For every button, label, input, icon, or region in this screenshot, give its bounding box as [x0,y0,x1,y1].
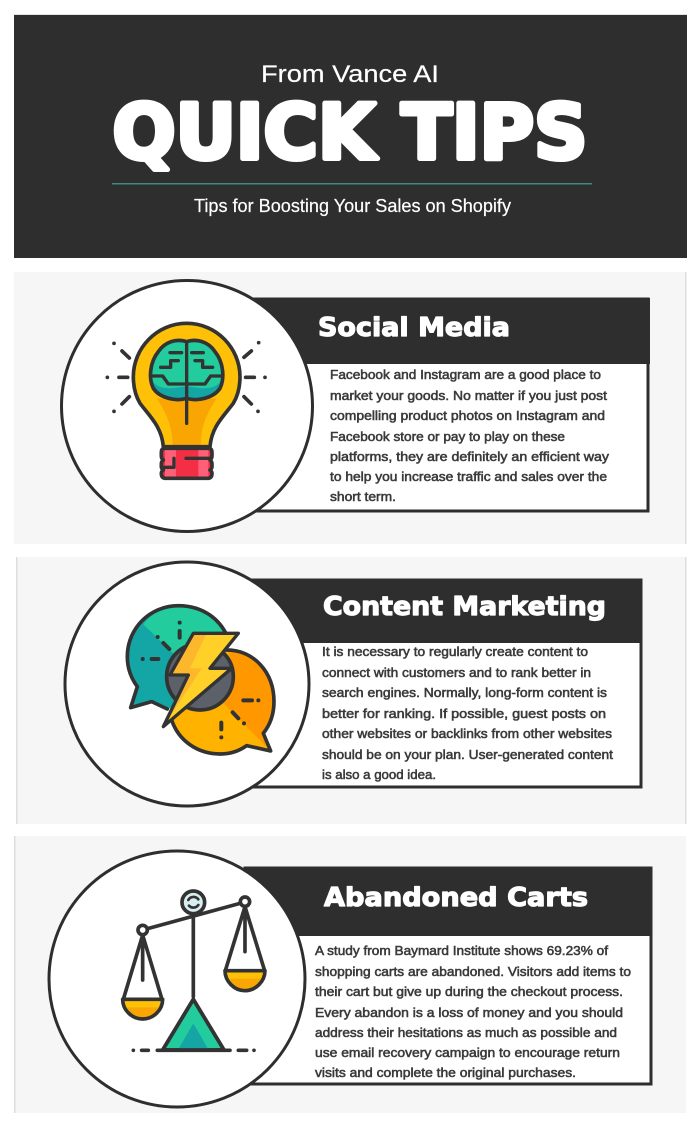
body text: other websites or backlinks from other websites [322,726,613,741]
body text: address their hesitations as much as possible and [315,1025,617,1040]
body text [322,644,613,782]
body text: should be on your plan. User-generated content [322,747,613,762]
heading bar [250,579,642,643]
panel: abandoned carts [14,836,686,1113]
header kicker: From Vance AI [261,61,439,88]
body text [330,367,610,504]
heading bar [250,298,650,364]
body text: is also a good idea. [322,767,436,782]
panel: social media [14,272,686,544]
body text: Every abandon is a loss of money and you should [315,1005,623,1020]
body text: search engines. Normally, long-form content is [322,685,608,700]
header rule [112,183,592,184]
icon circle [65,562,309,806]
body text: market your goods. No matter if you just post [330,388,607,403]
body text: compelling product photos on Instagram and [330,408,605,423]
body text: shopping carts are abandoned. Visitors add items to [315,964,631,979]
body text: Facebook store or pay to play on these [330,429,565,444]
body text: short term. [330,489,396,504]
body text: visits and complete the original purchases. [315,1065,576,1080]
icon circle [62,280,312,532]
body text: connect with customers and to rank better in [322,665,591,680]
subtitle: Tips for Boosting Your Sales on Shopify [194,196,511,216]
icon circle [49,851,305,1107]
body text: It is necessary to regularly create content to [322,644,588,659]
body text: A study from Baymard Institute shows 69.23% of [315,943,608,958]
heading: Abandoned Carts [324,883,588,913]
heading: Social Media [318,313,510,343]
body text [315,943,631,1080]
icon: speech bubbles with lightning [127,606,274,754]
body text: platforms, they are definitely an efficient way [330,449,610,464]
text card [245,868,651,1084]
icon: light bulb with brain [107,323,265,478]
body text: their cart but give up during the checkout process. [315,984,623,999]
text card [250,299,648,511]
heading: Content Marketing [323,592,606,622]
body text: use email recovery campaign to encourage return [315,1045,620,1060]
icon: balance scale [123,891,265,1050]
header banner [14,14,687,258]
body text: better for ranking. If possible, guest posts on [322,706,606,721]
heading bar [245,867,652,936]
body text: Facebook and Instagram are a good place to [330,367,601,382]
title: QUICK TIPS [112,88,588,176]
text card [250,580,641,787]
panel: content marketing [16,557,686,824]
body text: to help you increase traffic and sales over the [330,469,607,484]
